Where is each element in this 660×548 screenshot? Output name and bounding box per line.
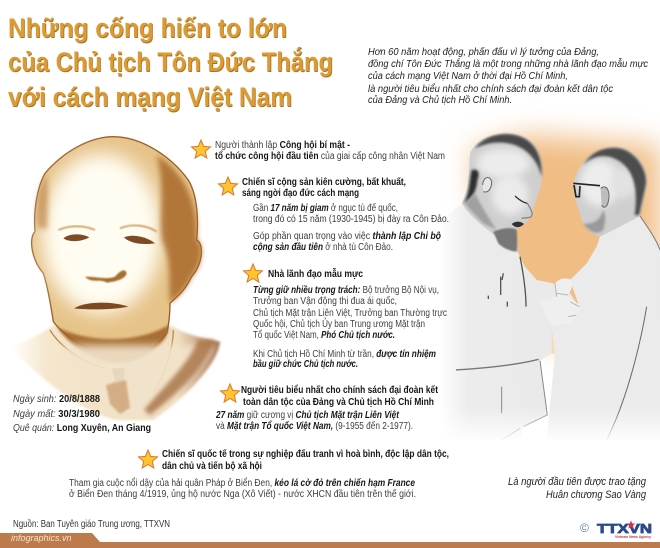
- portrait nose: [85, 270, 127, 283]
- left man hair crown: [475, 134, 542, 177]
- right man body: [547, 216, 660, 440]
- left man body: [440, 205, 580, 440]
- body text: [253, 284, 447, 370]
- portrait lower edge shading: [144, 340, 215, 415]
- portrait left brow: [58, 226, 95, 230]
- title: [8, 13, 333, 112]
- portrait right brow: [120, 225, 157, 232]
- intro paragraph: [368, 46, 648, 106]
- heading: Người tiêu biểu nhất cho chính sách đại đoàn kết: [241, 384, 439, 396]
- heading: dân chủ và tiến bộ xã hội: [162, 460, 262, 472]
- footer tab: [0, 533, 100, 542]
- body text: [215, 410, 413, 432]
- left man eyebrow and eye: [515, 196, 527, 203]
- body text: [253, 202, 449, 253]
- body text: trong đó có 15 năm (1930-1945) bị đày ra Côn Đảo.: [253, 214, 449, 225]
- right man glasses: [573, 183, 600, 197]
- intro paragraph: của Đảng và Chủ tịch Hồ Chí Minh.: [368, 94, 512, 106]
- right man face light: [580, 160, 620, 207]
- heading: [162, 448, 449, 472]
- logo subtitle: Vietnam News Agency: [615, 534, 652, 539]
- biography details: Ngày mất: 30/3/1980: [13, 408, 100, 420]
- body text: Khi Chủ tịch Hồ Chí Minh từ trần, được tín nhiệm: [253, 348, 436, 360]
- biography details: Ngày sinh: 20/8/1888: [13, 394, 100, 405]
- biography details: Quê quán: Long Xuyên, An Giang: [13, 423, 151, 434]
- heading: Nhà lãnh đạo mẫu mực: [268, 267, 363, 280]
- left man head: [462, 134, 542, 252]
- body text: Góp phần quan trọng vào việc thành lập Chi bộ: [253, 230, 441, 242]
- portrait tie: [105, 368, 127, 390]
- figure: right man: [547, 147, 660, 440]
- portrait left temple shading: [37, 173, 48, 230]
- portrait of Tôn Đức Thắng: [10, 137, 220, 420]
- photo: Ho Chi Minh pinning the medal: [440, 134, 660, 443]
- portrait left eye: [63, 234, 89, 241]
- intro paragraph: Hơn 60 năm hoạt động, phấn đấu vì lý tưởng của Đảng,: [368, 46, 599, 58]
- left man face light: [492, 175, 528, 215]
- photo caption: [508, 476, 647, 501]
- body text: bầu giữ chức Chủ tịch nước.: [253, 358, 358, 370]
- portrait lower garment: [60, 345, 215, 416]
- left man beard: [493, 228, 517, 252]
- body text: 27 năm giữ cương vị Chủ tịch Mặt trận Liên Việt: [215, 410, 400, 421]
- belt line: [456, 359, 539, 370]
- body text: ở Biển Đen tháng 4/1919, ủng hộ nước Nga (Xô Viết) - nước XHCN đầu tiên trên thế giới.: [69, 488, 416, 500]
- title: của Chủ tịch Tôn Đức Thắng: [8, 46, 333, 77]
- heading: [242, 176, 406, 199]
- logo star: [627, 520, 635, 529]
- portrait tie lower: [106, 380, 130, 414]
- source: Nguồn: Ban Tuyên giáo Trung ương, TTXVN: [13, 518, 170, 530]
- biography details: [13, 394, 151, 434]
- section: communist soldier: [218, 176, 449, 253]
- portrait right eye: [124, 236, 155, 244]
- intro paragraph: là người tiêu biểu nhất cho chính sách đại đoàn kết dân tộc: [368, 83, 613, 95]
- TTXVN logo: [580, 520, 652, 539]
- photo bottom fade: [440, 407, 660, 443]
- right man head: [573, 147, 647, 237]
- section: founder of secret union: [191, 140, 445, 162]
- portrait body and shirt: [10, 325, 220, 420]
- body text: Từng giữ nhiều trọng trách: Bộ trưởng Bộ Nội vụ,: [253, 284, 439, 296]
- icon: star: [220, 384, 240, 402]
- body text: Quốc hội, Chủ tịch Ủy ban Trung ương Mặt trận: [253, 317, 425, 330]
- body text: Tham gia cuộc nổi dậy của hải quân Pháp ở Biển Đen, kéo lá cờ đỏ trên chiến hạm France: [69, 477, 415, 489]
- text: founder: [215, 140, 445, 162]
- lower orange gap: [549, 323, 560, 353]
- figure: left man: [440, 134, 580, 440]
- footer strip: [0, 542, 660, 548]
- jacket edge: [502, 361, 547, 440]
- body text: [69, 477, 416, 500]
- text: founder: Người thành lập Công hội bí mật -: [215, 140, 350, 151]
- left man forehead light: [477, 148, 530, 178]
- portrait face highlight: [42, 153, 162, 313]
- portrait collar lines: [50, 330, 173, 393]
- right man coat seam: [607, 307, 647, 440]
- icon: star: [243, 264, 263, 282]
- body text: Gần 17 năm bị giam ở ngục tù đế quốc,: [253, 202, 398, 214]
- hands: [540, 278, 580, 327]
- copyright mark: ©: [580, 521, 589, 535]
- footer bar: [0, 533, 660, 548]
- section: exemplary leader: [243, 264, 447, 370]
- title: Những cống hiến to lớn: [8, 13, 287, 43]
- portrait head: [32, 137, 201, 358]
- heading: toàn dân tộc của Đảng và Chủ tịch Hồ Chí Minh: [243, 396, 434, 408]
- footer site name: infographics.vn: [11, 533, 72, 543]
- right man hair: [583, 148, 646, 215]
- body text: Chủ tịch Mặt trận Liên Việt, Trưởng ban Thường trực: [253, 307, 447, 319]
- right man jaw shadow: [583, 210, 605, 233]
- orange gap between figures: [518, 180, 600, 283]
- right man ear: [601, 187, 609, 207]
- portrait mouth: [74, 303, 128, 309]
- section: international soldier: [69, 448, 449, 500]
- portrait right-side hair shading: [157, 155, 201, 303]
- right man shoulder line: [640, 216, 660, 250]
- icon: star: [218, 177, 238, 195]
- portrait chin and neck shadow: [57, 325, 168, 363]
- section: national unity: [215, 384, 439, 432]
- body text: Trưởng ban Vận động thi đua ái quốc,: [253, 295, 397, 307]
- logo letters: TTXVN: [597, 521, 652, 536]
- intro paragraph: của cách mạng Việt Nam ở thời đại Hồ Chí Minh,: [368, 70, 568, 82]
- heading: [241, 384, 439, 408]
- body text: và Mặt trận Tổ quốc Việt Nam, (9-1955 đến 2-1977).: [216, 420, 413, 432]
- icon: star: [138, 450, 158, 468]
- icon: star: [191, 140, 211, 158]
- left man hair side: [464, 170, 479, 203]
- orange glow behind photo: [472, 135, 660, 345]
- heading: Chiến sĩ cộng sản kiên cường, bất khuất,: [242, 176, 406, 188]
- left man neck shadow: [465, 193, 497, 230]
- finger shading: [555, 283, 579, 317]
- text: founder: tổ chức công hội đầu tiên của giai cấp công nhân Việt Nam: [215, 150, 445, 162]
- body text: cộng sản đầu tiên ở nhà tù Côn Đảo.: [253, 241, 393, 253]
- right man scalp light: [610, 168, 637, 198]
- heading: Chiến sĩ quốc tế trong sự nghiệp đấu tranh vì hoà bình, độc lập dân tộc,: [162, 448, 449, 460]
- left man ear: [483, 178, 492, 192]
- left man moustache: [512, 222, 524, 227]
- left man nose shadow: [522, 203, 532, 218]
- title: với cách mạng Việt Nam: [8, 82, 292, 112]
- body text: Tổ quốc Việt Nam, Phó Chủ tịch nước.: [253, 329, 395, 341]
- heading: sáng ngời đạo đức cách mạng: [242, 188, 359, 199]
- buttons and placket: [488, 257, 526, 307]
